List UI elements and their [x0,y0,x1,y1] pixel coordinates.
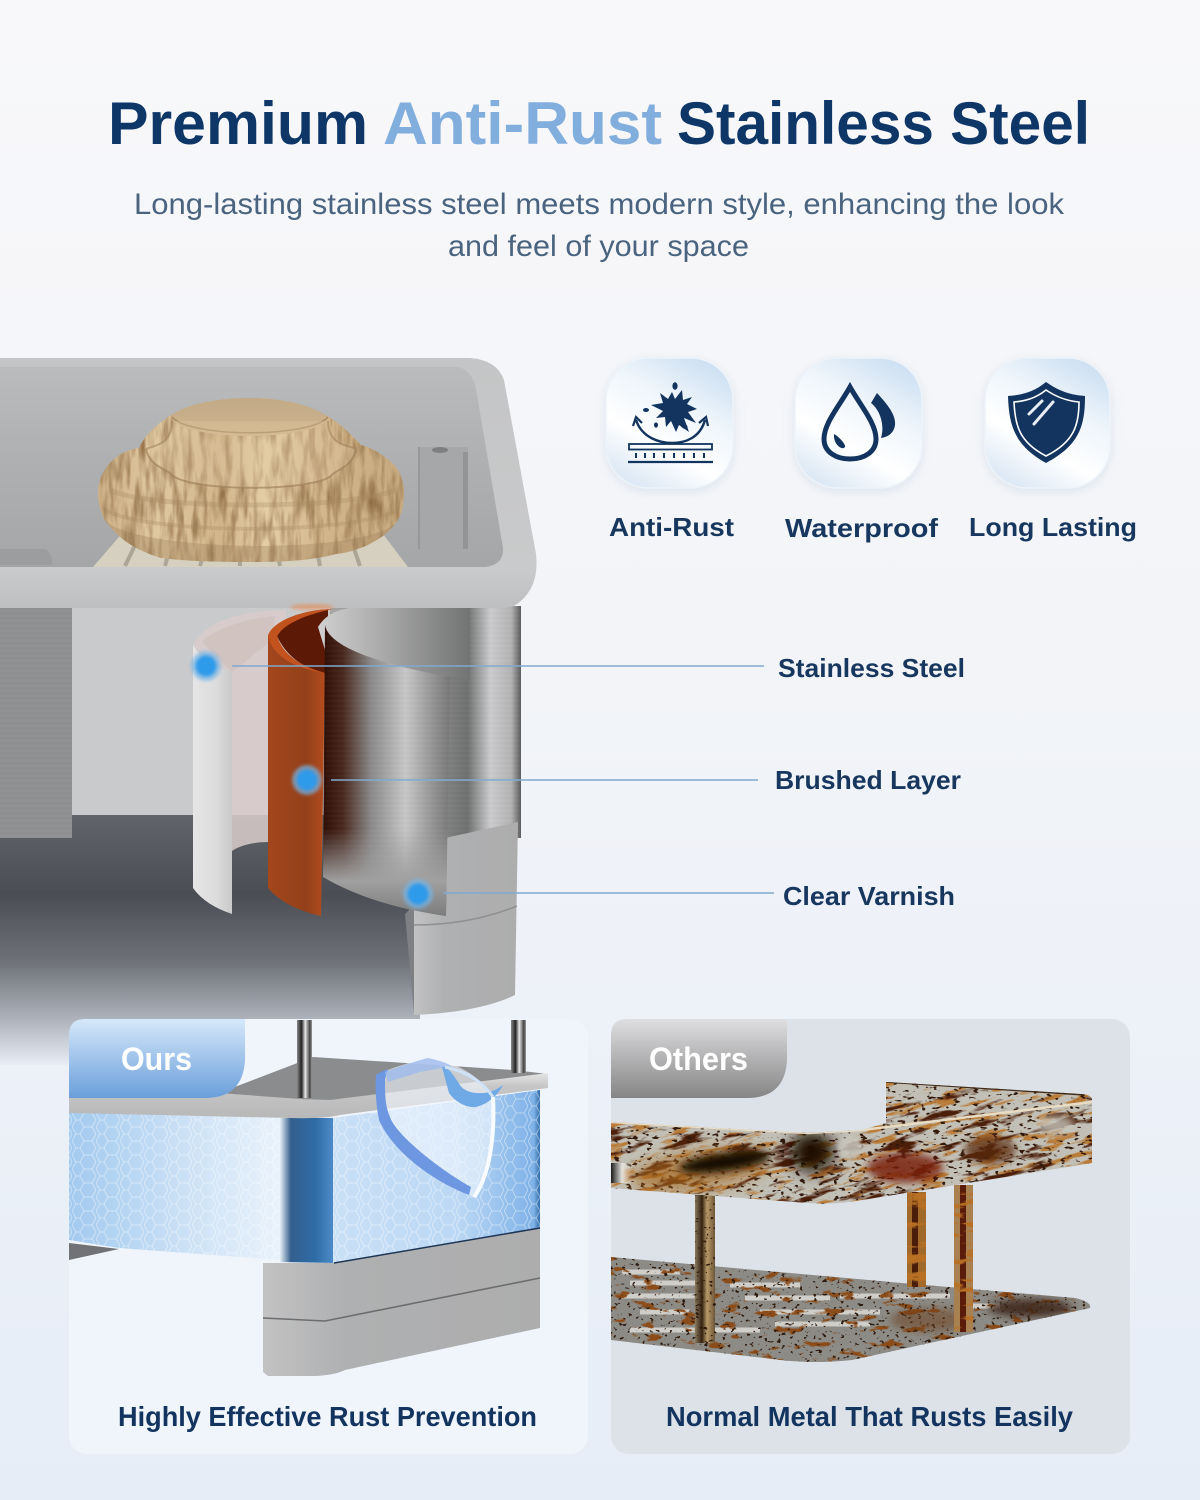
rusty bottom tray [611,1257,1090,1362]
subtitle: Long-lasting stainless steel meets modern style, enhancing the look [134,188,1065,221]
shadow under tray [0,810,420,1065]
label: stainless steel: Stainless Steel [778,653,965,683]
copper brushed layer [268,609,332,916]
light side panel [72,606,342,815]
rusty top rim [611,1082,1092,1204]
label: anti-rust: Anti-Rust [609,512,734,542]
stainless side wall [330,606,521,838]
title: Premium [108,90,368,157]
marker dot: brushed layer [292,765,322,795]
shelf rim [69,1073,548,1118]
tray rim [0,358,537,608]
icon: anti-rust [606,358,733,488]
subtitle [134,188,1065,263]
honeycomb right face [333,1090,540,1263]
honeycomb corner [280,1118,334,1263]
marker dot: stainless steel [191,651,221,681]
interior slot [0,549,52,565]
wooden brush knob [95,390,407,565]
label: long lasting: Long Lasting [969,512,1137,542]
shelf leg [263,1228,540,1376]
leg [405,822,518,1015]
label: waterproof: Waterproof [785,513,938,543]
product: rusty shelf [611,1082,1092,1362]
product: anti-rust shelf [69,1020,548,1376]
tab: ours [69,1019,245,1098]
title: Anti-Rust [383,90,662,157]
tab: others [611,1019,787,1098]
marker dot: clear varnish [403,879,433,909]
caption: others: Normal Metal That Rusts Easily [666,1401,1073,1432]
panel: others [611,1019,1130,1454]
honeycomb left face [69,1105,280,1260]
subtitle: and feel of your space [448,230,749,263]
clear varnish layer [193,610,290,914]
glow at layer top [290,604,334,610]
shelf posts [297,1020,526,1098]
tray interior [0,367,503,567]
leader line: stainless steel [232,665,764,667]
leader line: brushed layer [331,779,758,781]
protective shield [376,1058,503,1197]
caption: ours: Highly Effective Rust Prevention [118,1401,537,1432]
label: clear varnish: Clear Varnish [783,881,955,911]
title [108,90,1090,157]
panel: ours [69,1019,588,1454]
rusty posts [695,1185,973,1343]
product: tray cutaway illustration [0,358,537,1065]
tab: ours: Ours [121,1041,192,1077]
tab: others: Others [649,1041,748,1077]
icon: waterproof [795,358,922,488]
icon: long lasting shield [985,358,1110,488]
brush bristles [93,530,408,567]
title: Stainless Steel [677,90,1090,157]
leader line: clear varnish [443,892,774,894]
shelf top surface [219,1057,548,1104]
label: brushed layer: Brushed Layer [775,765,961,795]
interior post [418,447,468,549]
stainless steel layer [318,608,470,916]
shelf shadow tip [69,1243,119,1260]
left brushed panel [0,606,72,838]
